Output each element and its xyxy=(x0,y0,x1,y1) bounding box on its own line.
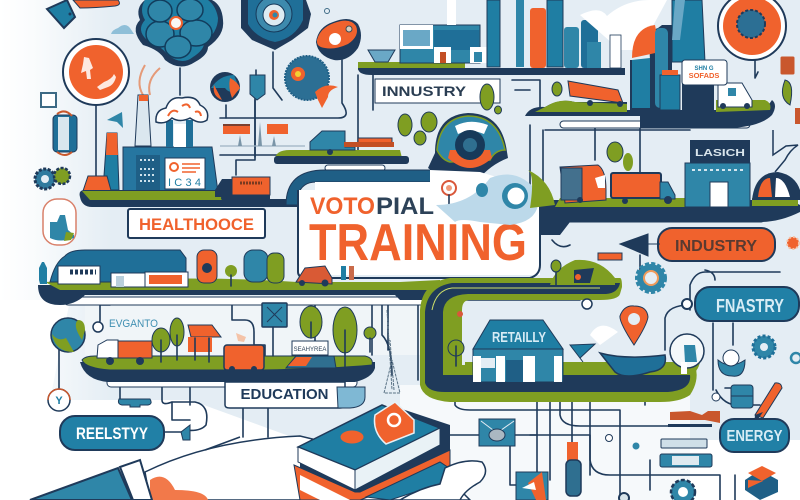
icon: wrench shape xyxy=(436,174,538,225)
icon: gear right xyxy=(753,336,775,358)
icon: orange lorry xyxy=(568,81,623,107)
label: education xyxy=(225,382,365,408)
panel: tall towers right xyxy=(628,0,730,110)
icon: arrow xyxy=(620,234,660,256)
icon: red bus xyxy=(560,165,606,203)
panel: left long platform xyxy=(38,250,470,305)
icon: dial half xyxy=(718,350,745,376)
icon: small y badge: Y xyxy=(55,395,63,407)
panel: lower right platform with depot xyxy=(528,130,800,235)
icon: small cloud xyxy=(104,25,134,34)
icon: blue box xyxy=(712,385,753,408)
icon: small ring xyxy=(606,434,612,442)
panel: healthcare platform xyxy=(80,177,300,238)
icon: white van xyxy=(718,83,752,109)
icon: coil device xyxy=(53,111,77,155)
label: safety sign xyxy=(682,60,727,85)
label: healthcare xyxy=(128,209,265,238)
label: industry sign: INNUSTRY xyxy=(382,83,467,99)
icon: small blue tray xyxy=(118,399,151,407)
icon: small square xyxy=(41,93,56,107)
title text: VOTO xyxy=(310,193,375,220)
icon: small orange leaf badge xyxy=(780,56,800,124)
icon: blue globe xyxy=(51,318,85,352)
icon: blue service van xyxy=(286,341,336,368)
icon: white connector node xyxy=(582,299,592,309)
icon: person xyxy=(39,262,47,284)
icon: smoke cloud xyxy=(156,97,208,123)
icon: depot building xyxy=(685,140,750,207)
icon: orange blob node xyxy=(316,19,361,60)
label: healthcare: HEALTHOOCE xyxy=(139,215,254,234)
icon: orange cargo truck xyxy=(97,340,152,365)
title text xyxy=(309,193,527,272)
small banner flags xyxy=(220,122,305,146)
icon: small blue arrow xyxy=(107,112,123,128)
label: industry pill: INDUSTRY xyxy=(675,238,757,255)
label: fnastry pill: FNASTRY xyxy=(716,296,784,316)
icon: marker pen xyxy=(566,442,581,496)
icon: small lens xyxy=(670,334,704,374)
panel: upper mid green platform xyxy=(274,131,409,164)
label: fnastry pill xyxy=(695,287,799,321)
title text: PIAL xyxy=(376,193,434,220)
icon: orange badge xyxy=(374,402,414,444)
icon: large blue flower cloud xyxy=(136,0,223,67)
icon: capsule picture xyxy=(43,199,76,245)
icon: lattice tower xyxy=(384,310,400,393)
icon: blue sign xyxy=(262,303,287,356)
icon: tree pair top xyxy=(398,82,562,145)
icon: orange truck xyxy=(215,177,270,201)
icon: bottom ring xyxy=(619,493,629,500)
icon: fingers over books xyxy=(400,461,486,500)
caption: evganto: EVGANTO xyxy=(109,318,158,330)
icon: pipe rack xyxy=(660,439,712,467)
icon: round orange globe xyxy=(210,72,240,102)
icon: large gear dial xyxy=(241,0,311,50)
panel: retail green frame xyxy=(420,260,704,402)
icon: blue and green capsules xyxy=(244,250,284,283)
icon: flag pole xyxy=(773,130,798,172)
label: safety sign: SHN G xyxy=(694,66,714,72)
label: education: EDUCATION xyxy=(240,386,328,403)
label: industry pill xyxy=(658,228,775,261)
icon: orange roof shelter xyxy=(188,325,221,362)
icon: orange safety circle xyxy=(63,39,129,105)
icon: small ring node xyxy=(93,322,103,332)
icon: retail store: RETAILLY xyxy=(492,330,546,346)
icon: orange container truck xyxy=(224,333,264,372)
icon: orange palm shading xyxy=(150,477,208,500)
icon: book stack xyxy=(294,402,486,500)
icon: orange delivery truck xyxy=(611,173,675,204)
icon: sleeve xyxy=(30,460,152,500)
icon: small gear ring edge xyxy=(791,353,800,363)
icon: gears xyxy=(35,168,70,189)
icon: small y badge xyxy=(48,389,70,411)
icon: blue gear center xyxy=(637,264,665,292)
panel: education platform xyxy=(80,306,376,408)
icon: square photo xyxy=(516,472,548,500)
icon: tree xyxy=(225,265,237,286)
icon: orange gear in circle xyxy=(718,0,786,78)
icon: earth device xyxy=(285,56,338,108)
icon: orange dome xyxy=(752,172,800,200)
icon: blue fish shape xyxy=(570,326,665,376)
panel: central title xyxy=(286,170,540,278)
icon: station building xyxy=(50,250,188,287)
icon: trees group xyxy=(152,318,184,362)
label: safety sign: SOFADS xyxy=(689,71,719,80)
icon: red dots xyxy=(457,311,463,317)
icon: open hand holding books xyxy=(30,436,485,500)
icon: people xyxy=(341,266,354,280)
icon: depot building: LASICH xyxy=(695,147,745,159)
title text: TRAINING xyxy=(309,214,527,272)
icon: orange capsule xyxy=(197,250,217,283)
label: reelstyy pill: REELSTYY xyxy=(76,425,148,443)
icon: test tube xyxy=(250,70,265,157)
label: energy pill xyxy=(720,419,789,452)
white strips under platforms xyxy=(64,121,765,387)
icon: camera lens xyxy=(428,113,508,180)
icon: hand with cuff xyxy=(47,0,119,28)
icon: orange red bench xyxy=(668,411,720,427)
icon: blue service van: SEAHYREA xyxy=(294,347,326,353)
icon: blue truck xyxy=(310,131,394,155)
label: reelstyy pill xyxy=(60,416,164,450)
icon: envelope xyxy=(479,419,515,446)
icon: pencil xyxy=(754,383,782,425)
icon: bottom gear xyxy=(671,480,695,500)
panel: right upper platform xyxy=(525,60,775,128)
icon: plug arrow xyxy=(181,425,190,440)
icon: tall trees xyxy=(300,306,376,368)
icon: map pin on title xyxy=(442,181,456,205)
icon: map pin xyxy=(620,306,648,345)
panel: industry factories xyxy=(358,0,667,103)
label: industry sign xyxy=(375,79,500,103)
icon: small pin marker xyxy=(324,8,330,14)
icon: factory with smoke xyxy=(82,65,218,194)
icon: trees near depot xyxy=(607,142,633,171)
icon: retail store xyxy=(473,320,563,382)
icon: small red car xyxy=(296,266,332,286)
icon: connector node xyxy=(682,299,692,309)
icon: blue dot cluster xyxy=(632,442,640,450)
label: energy pill: ENERGY xyxy=(726,428,783,445)
icon: orange key arrow xyxy=(598,253,622,260)
icon: small gear orange xyxy=(787,237,799,249)
icon: stacked layers xyxy=(745,466,778,500)
icon: factory with smoke: IC34 xyxy=(168,177,201,189)
